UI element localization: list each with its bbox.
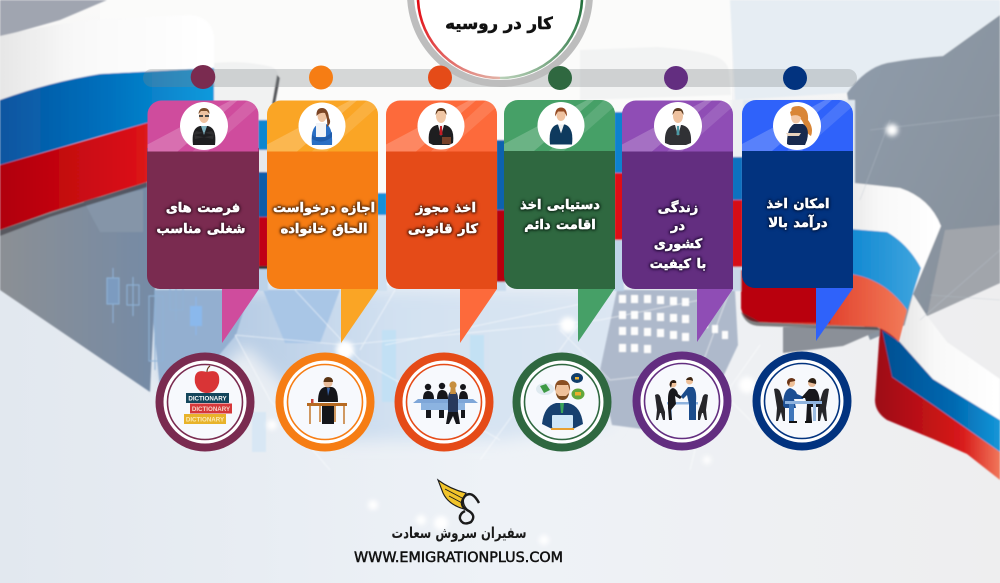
avatar: woman with papers xyxy=(298,102,346,150)
card text: فرصت های xyxy=(166,201,240,216)
left flag ribbon xyxy=(0,15,214,100)
company logo xyxy=(354,480,563,566)
card 6: high income xyxy=(742,100,853,341)
medallion 5: business handshake xyxy=(632,352,732,450)
left grey shape xyxy=(0,182,160,392)
central blue hands area xyxy=(147,290,640,440)
medallion 1: dictionary books: DICTIONARY xyxy=(188,396,228,402)
avatar: woman with long hair xyxy=(773,102,821,150)
card 1: job opportunities xyxy=(147,100,259,343)
card text: زندگی xyxy=(658,200,698,216)
website address: WWW.EMIGRATIONPLUS.COM xyxy=(354,550,563,566)
card text: درآمد بالا xyxy=(768,214,828,231)
timeline dot 6 xyxy=(783,66,807,90)
pale top right xyxy=(730,0,1000,100)
timeline dot 2 xyxy=(309,66,333,90)
card 3: legal work permit xyxy=(386,100,497,343)
medallion 1: dictionary books: DICTIONARY xyxy=(186,416,225,424)
logo: winged S emblem xyxy=(438,480,479,523)
top left grey xyxy=(0,0,107,37)
timeline dot 5 xyxy=(664,66,688,90)
card text: امکان اخذ xyxy=(767,197,829,212)
apple xyxy=(195,371,219,393)
card text: در xyxy=(670,219,685,234)
stripes visible in gap between cards 4 and 5 xyxy=(614,112,624,291)
avatar: woman in navy suit xyxy=(538,102,584,149)
card 2: family reunion xyxy=(267,100,378,343)
timeline bar xyxy=(143,69,857,87)
card text: شغلی مناسب xyxy=(157,222,245,237)
card text: کشوری xyxy=(654,237,703,252)
title badge xyxy=(407,0,593,87)
stripes visible in gap between cards 3 and 4 xyxy=(496,140,506,291)
stripes visible in gap between cards 5 and 6 xyxy=(732,100,743,291)
candle chart xyxy=(107,268,202,370)
stripes visible in gap between cards 1 and 2 xyxy=(258,120,268,291)
avatar: man with red tie xyxy=(418,102,464,150)
card text: دستیابی اخذ xyxy=(520,198,600,213)
card 5: quality of life xyxy=(622,100,733,342)
timeline dot 3 xyxy=(428,66,452,90)
avatar: man with glasses xyxy=(180,102,228,150)
medallion 4: consultant with laptop xyxy=(512,352,612,452)
medallion 1: dictionary books: DICTIONARY xyxy=(192,406,231,413)
lower ribbon xyxy=(875,328,1000,480)
medallion 1: dictionary books xyxy=(156,352,254,452)
card text: کار قانونی xyxy=(408,222,478,237)
card text: اقامت دائم xyxy=(524,218,596,233)
timeline dot 1 xyxy=(191,65,215,89)
logo: company name: سفیران سروش سعادت xyxy=(392,524,526,542)
card 4: permanent residence xyxy=(504,100,615,342)
medallion 3: interview panel xyxy=(394,352,494,452)
avatar: man in grey suit xyxy=(654,102,702,150)
card text: اجازه درخواست xyxy=(273,201,375,216)
right dark hand xyxy=(847,15,1000,340)
stripes visible in gap between cards 2 and 3 xyxy=(377,193,387,291)
network lines xyxy=(235,290,760,470)
building windows xyxy=(619,295,728,353)
card text: الحاق خانواده xyxy=(281,222,367,237)
medallion 2: man at desk xyxy=(276,352,374,452)
right flag ribbon xyxy=(845,182,941,294)
middle white flag segment xyxy=(214,62,278,275)
medallion 6: meeting at table xyxy=(752,352,852,450)
card text: با کیفیت xyxy=(650,257,706,272)
card text: اخذ مجوز xyxy=(415,201,476,216)
title: کار در روسیه xyxy=(445,14,553,34)
glows xyxy=(267,124,898,545)
timeline dot 4 xyxy=(548,66,572,90)
red ribbon fold right xyxy=(741,270,907,342)
